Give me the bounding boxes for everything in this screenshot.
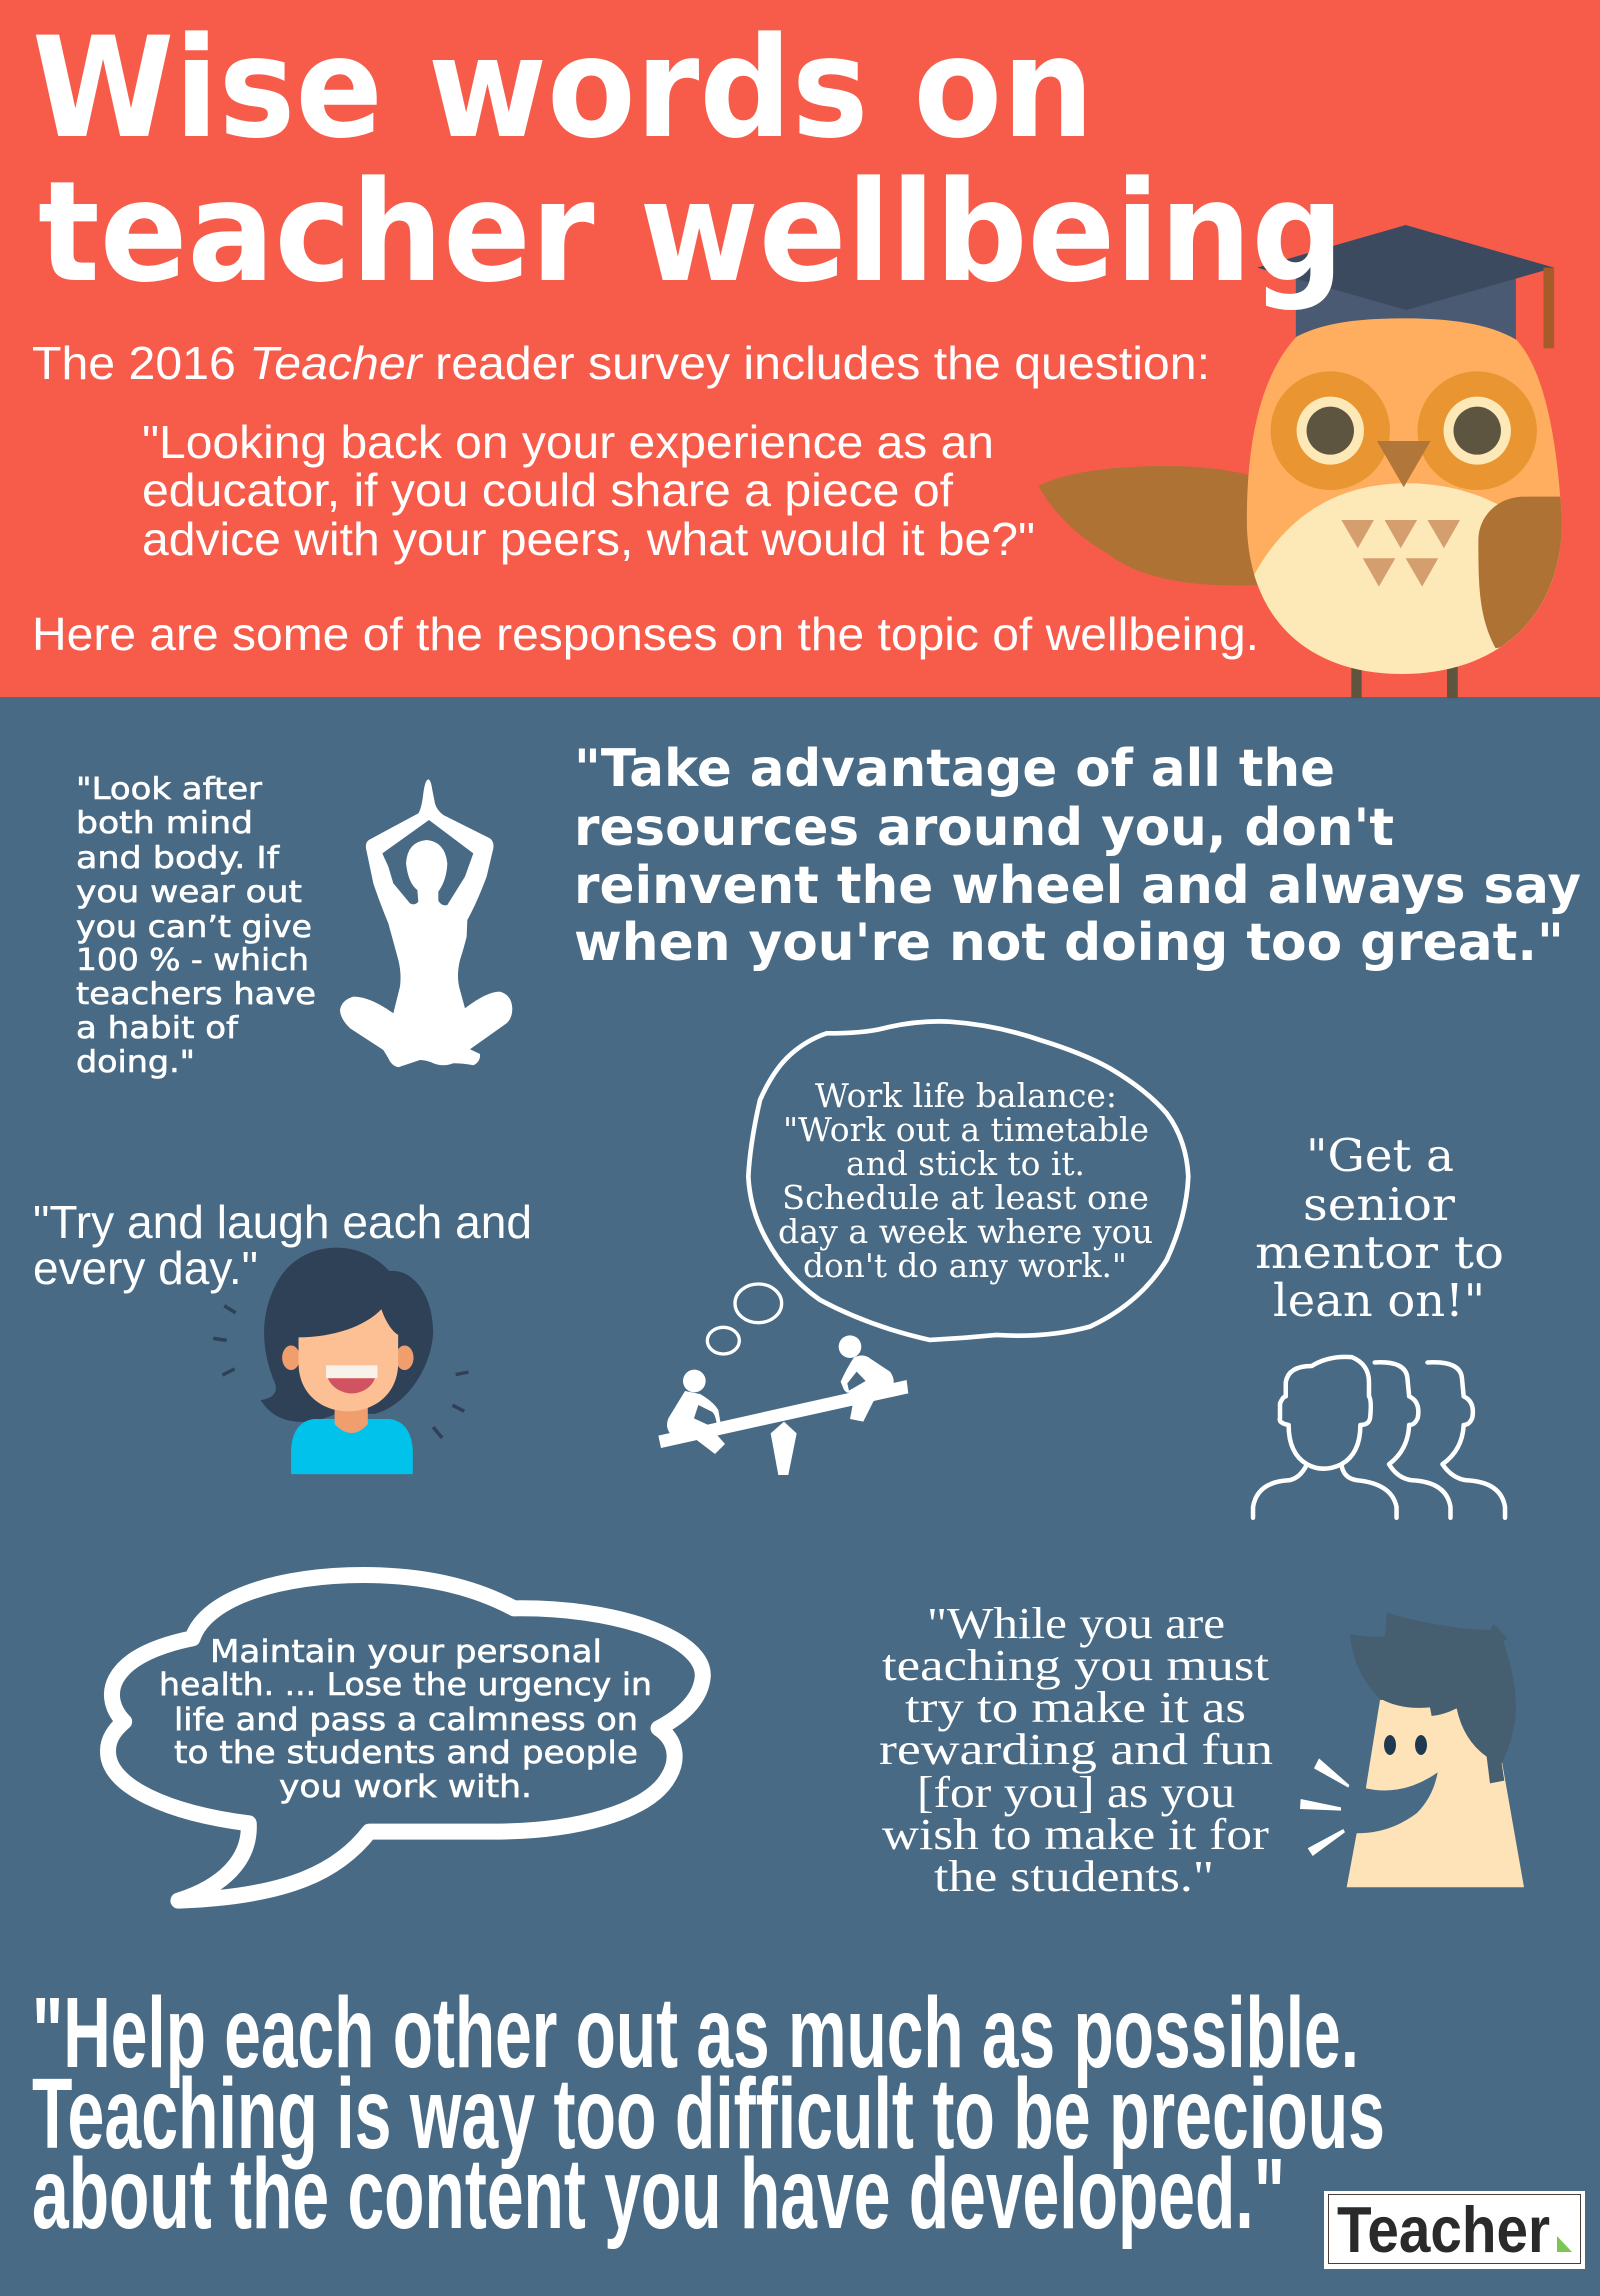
owl body (1247, 318, 1562, 674)
icon: seesaw with two people (658, 1335, 908, 1475)
quote: take advantage of resources: when you're not doing too great." (574, 913, 1564, 973)
man face (1347, 1700, 1524, 1887)
quote: laugh each day (33, 1196, 532, 1294)
icon: yoga figure (340, 779, 512, 1067)
laughter lines (213, 1306, 469, 1438)
quote: work life balance: day a week where you (778, 1212, 1153, 1251)
seesaw board (658, 1380, 908, 1448)
quote: rewarding teaching: wish to make it for (882, 1810, 1269, 1859)
quote: rewarding teaching: teaching you must (882, 1641, 1269, 1690)
thought bubble (707, 1021, 1188, 1354)
quote: work life balance: don't do any work." (803, 1246, 1127, 1285)
seesaw pivot (771, 1422, 797, 1475)
quote: rewarding teaching: the students." (934, 1852, 1214, 1901)
quote: take advantage of resources: resources around you, don't (574, 798, 1394, 858)
owl beak (1377, 441, 1431, 487)
cap tassel (1543, 268, 1554, 348)
quote: rewarding teaching: "While you are (927, 1599, 1225, 1648)
quote: take advantage of resources (574, 739, 1581, 973)
quote: maintain personal health: you work with. (279, 1769, 532, 1805)
quote: laugh each day: "Try and laugh each and (33, 1196, 532, 1248)
woman ears (282, 1346, 414, 1370)
owl belly (1254, 483, 1560, 674)
icon: talking man (1300, 1613, 1524, 1887)
quote: work life balance: and stick to it. (846, 1144, 1085, 1183)
cap base (1296, 277, 1516, 343)
quote: take advantage of resources: reinvent the wheel and always say (574, 856, 1581, 916)
icon: owl with graduation cap (1038, 225, 1574, 700)
panel: red header (0, 0, 1600, 697)
intro text: advice with your peers, what would it be?" (142, 513, 1035, 565)
quote: rewarding teaching: try to make it as (905, 1683, 1246, 1732)
quote: senior mentor: "Get a (1306, 1129, 1454, 1182)
quote: work life balance: Schedule at least one (782, 1178, 1149, 1217)
man mouth (1330, 1772, 1438, 1833)
owl left wing (1038, 466, 1260, 586)
cap top (1257, 225, 1554, 310)
intro text: educator, if you could share a piece of (142, 464, 953, 516)
owl eyes (1271, 371, 1537, 490)
quote: look after mind and body: a habit of (76, 1011, 240, 1046)
quote: rewarding teaching (879, 1599, 1273, 1901)
quote: senior mentor (1255, 1129, 1504, 1327)
quote: work life balance: "Work out a timetable (783, 1110, 1149, 1149)
quote: help each other (32, 1977, 1385, 2250)
intro text: "Looking back on your experience as an (142, 416, 994, 468)
owl right wing (1478, 496, 1562, 648)
owl legs (1351, 667, 1458, 698)
quote: rewarding teaching: [for you] as you (917, 1768, 1235, 1817)
quote: rewarding teaching: rewarding and fun (879, 1725, 1273, 1774)
quote: work life balance (778, 1076, 1153, 1285)
quote: laugh each day: every day." (33, 1242, 258, 1294)
owl chest feathers (1341, 520, 1460, 587)
quote: look after mind and body: you can’t give (76, 910, 312, 945)
quote: maintain personal health: to the students and people (174, 1735, 638, 1771)
speech bubble (108, 1575, 703, 1901)
quote: senior mentor: mentor to (1255, 1226, 1504, 1279)
left person (667, 1370, 725, 1454)
woman face (299, 1309, 398, 1411)
quote: maintain personal health: Maintain your personal (210, 1634, 602, 1670)
man hair (1350, 1613, 1516, 1783)
title: teacher wellbeing (38, 151, 1344, 313)
title: Wise words on (32, 7, 1094, 169)
quote: look after mind and body: both mind (76, 806, 253, 841)
bubble outline (748, 1021, 1188, 1340)
logo: Teacher: Teacher (1337, 2193, 1550, 2266)
quote: maintain personal health: life and pass a calmness on (174, 1702, 638, 1738)
woman neck (335, 1406, 368, 1433)
quote: look after mind and body: and body. If (76, 841, 281, 876)
quote: take advantage of resources: "Take advantage of all the (574, 739, 1335, 799)
quote: look after mind and body: you wear out (76, 875, 302, 910)
man eyes (1384, 1735, 1427, 1755)
intro text: Here are some of the responses on the topic of wellbeing. (32, 608, 1259, 660)
quote: look after mind and body: doing." (76, 1045, 195, 1080)
icon: laughing woman (213, 1248, 469, 1474)
quote: senior mentor: lean on!" (1273, 1274, 1485, 1327)
intro text: The 2016 Teacher reader survey includes the question: (32, 337, 1210, 389)
quote: senior mentor: senior (1303, 1178, 1456, 1231)
large thought circle (735, 1284, 782, 1323)
quote: maintain personal health (159, 1634, 652, 1805)
woman shirt (291, 1419, 413, 1474)
quote: look after mind and body (76, 772, 316, 1080)
quote: look after mind and body: 100 % - which (76, 943, 309, 978)
intro text (32, 337, 1259, 660)
speech rays (1300, 1758, 1349, 1856)
icon: three people outline (1253, 1357, 1505, 1518)
woman mouth (326, 1365, 377, 1393)
quote: work life balance: Work life balance: (815, 1076, 1117, 1115)
quote: look after mind and body: teachers have (76, 977, 316, 1012)
small thought circle (707, 1327, 739, 1354)
right person (839, 1335, 894, 1422)
quote: look after mind and body: "Look after (76, 772, 263, 807)
quote: maintain personal health: health. ... Lose the urgency in (159, 1667, 652, 1703)
title (32, 7, 1344, 313)
woman hair (261, 1248, 433, 1422)
